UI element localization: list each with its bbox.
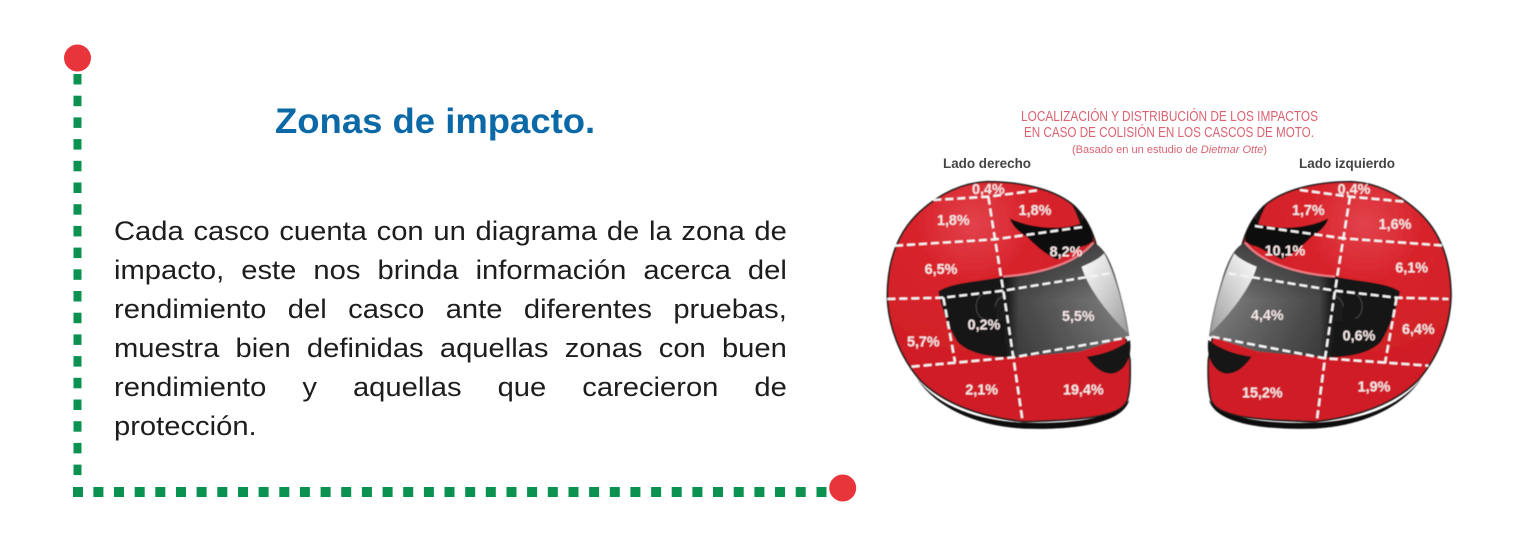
body text: rendimiento y aquellas que carecieron de [114,372,787,402]
helmet: right side: 1,8% [1019,203,1052,219]
helmet: left side: 1,6% [1379,217,1412,233]
helmet: right side: 2,1% [965,382,998,398]
helmet: left side: 6,4% [1402,322,1435,338]
red dot: top [64,44,91,72]
diagram title [1021,108,1318,156]
body text: Cada casco cuenta con un diagrama de la zona de [114,216,787,246]
body text: rendimiento del casco ante diferentes pruebas, [114,294,787,324]
dotted frame: vertical green line [74,74,82,475]
helmet: right side: 19,4% [1063,382,1104,398]
label: lado derecho: Lado derecho [943,155,1031,171]
diagram title: EN CASO DE COLISIÓN EN LOS CASCOS DE MOTO. [1024,124,1314,141]
helmet: right side: 0,4% [972,182,1005,198]
helmet: left side: 0,6% [1343,328,1376,344]
helmet: left side: 6,1% [1395,261,1428,277]
heading: Zonas de impacto. [275,102,595,141]
diagram title: LOCALIZACIÓN Y DISTRIBUCIÓN DE LOS IMPACTOS [1021,108,1318,125]
helmet: left side: 1,9% [1358,380,1391,396]
helmet: left side: 0,4% [1338,182,1371,198]
helmet: right side: 1,8% [937,213,970,229]
helmet: right side: 0,2% [968,317,1001,333]
helmet: left side: 1,7% [1292,203,1325,219]
body text: muestra bien definidas aquellas zonas con buen [114,333,787,363]
helmet: left side: 10,1% [1265,244,1306,260]
helmet: right side: 8,2% [1050,245,1083,261]
helmet: right side: 5,5% [1062,309,1095,325]
red dot: bottom right [829,474,856,502]
dotted frame: horizontal green line [73,487,826,497]
helmet: left side [1208,182,1451,429]
helmet: right side: 5,7% [907,335,940,351]
body text: impacto, este nos brinda información acerca del [114,255,787,285]
helmet: left side: 15,2% [1242,385,1283,401]
helmet: right side [887,182,1130,429]
label: lado izquierdo: Lado izquierdo [1299,155,1395,171]
diagram title: (Basado en un estudio de Dietmar Otte) [1072,144,1267,156]
helmet: left side: 4,4% [1251,308,1284,324]
body text [114,216,787,441]
body text: protección. [114,411,257,441]
helmet: right side: 6,5% [925,262,958,278]
